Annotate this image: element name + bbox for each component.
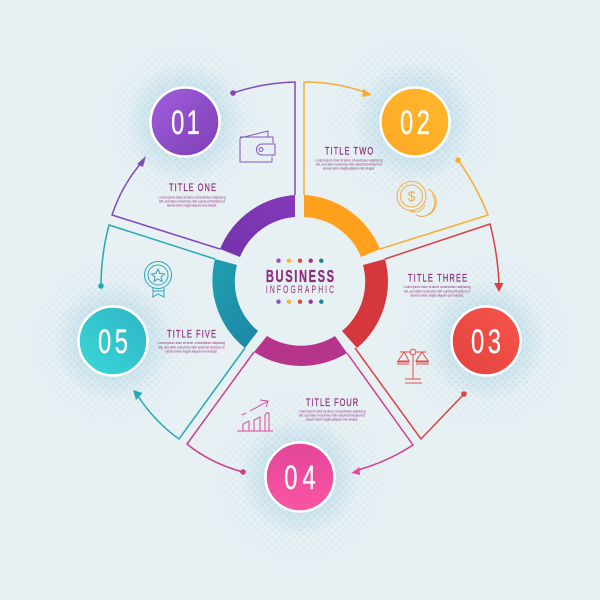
body text one: Lorem ipsum dolor sit amet, consectetuer adipiscing — [158, 195, 226, 199]
body text two — [316, 158, 382, 170]
title five: TITLE FIVE — [167, 327, 216, 340]
body text four: elit, sed diam nonummy nibh euismod tincidunt ut — [299, 414, 365, 418]
outline five with arrow — [98, 225, 245, 439]
infographic canvas — [38, 45, 563, 556]
ring segment five — [212, 259, 258, 348]
icon: coins: $ — [408, 188, 416, 204]
body text five: Lorem ipsum dolor sit amet, consectetuer adipiscing — [158, 341, 225, 345]
body text five — [158, 341, 225, 354]
icon: scales — [397, 349, 429, 383]
icon: medal — [144, 262, 172, 297]
body text three — [404, 285, 470, 297]
body text three: elit, sed diam nonummy nibh euismod tincidunt ut — [404, 289, 470, 293]
body text three: Lorem ipsum dolor sit amet, consectetuer adipiscing — [404, 285, 470, 289]
ring segment one — [220, 195, 295, 257]
title two: TITLE TWO — [325, 144, 373, 157]
icon: chart — [237, 400, 273, 431]
outline two with arrow — [304, 82, 488, 249]
body text five: elit, sed diam nonummy nibh euismod tincidunt ut — [158, 345, 224, 349]
heading business: BUSINESS — [266, 266, 334, 287]
body text two: Lorem ipsum dolor sit amet, consectetuer adipiscing — [316, 158, 382, 162]
subheading infographic: INFOGRAPHIC — [266, 283, 334, 295]
ring segment four — [254, 336, 347, 366]
body text one: elit, sed diam nonummy nibh euismod tincidunt ut — [159, 200, 225, 204]
outline four with arrow — [187, 352, 413, 475]
body text three: laoreet dolore magna aliquam erat volutpat. — [410, 293, 464, 297]
number badge 01: 01 — [171, 104, 200, 142]
title one: TITLE ONE — [169, 180, 216, 193]
ring segment two — [304, 195, 380, 257]
center title block — [266, 258, 334, 304]
number badge 05: 05 — [98, 323, 128, 361]
title four: TITLE FOUR — [306, 395, 358, 408]
halftone halos — [38, 45, 563, 556]
icon: wallet — [240, 131, 275, 162]
body text two: elit, sed diam nonummy nibh euismod tincidunt ut — [316, 162, 382, 166]
bottom dot row — [276, 300, 323, 304]
body text five: laoreet dolore magna aliquam erat volutpat. — [166, 350, 218, 354]
number badge 04 — [266, 442, 334, 512]
outline one with arrow — [112, 82, 295, 249]
number badge 02 — [380, 88, 450, 156]
title three: TITLE THREE — [408, 271, 467, 284]
number badge 03: 03 — [471, 323, 501, 361]
body text two: laoreet dolore magna aliquam erat volutpat. — [323, 166, 375, 170]
panel: step one — [112, 82, 295, 257]
body text four: laoreet dolore magna aliquam erat volutpat. — [306, 418, 358, 422]
body text four: Lorem ipsum dolor sit amet, consectetuer adipiscing — [298, 409, 366, 413]
body text one — [158, 195, 226, 208]
number badge 01 — [150, 88, 220, 156]
ring segment three — [342, 259, 388, 348]
panel: step five — [78, 225, 258, 439]
number badge 04: 04 — [284, 459, 316, 497]
number badge 02: 02 — [400, 104, 430, 142]
body text four — [298, 409, 366, 422]
icon: coins — [397, 182, 436, 217]
panel: step four — [187, 336, 413, 512]
top dot row — [276, 258, 323, 263]
number badge 05 — [78, 306, 148, 376]
panel: step two — [304, 82, 488, 257]
body text one: laoreet dolore magna aliquam erat volutpat. — [167, 204, 217, 208]
number badge 03 — [452, 306, 520, 376]
panel: step three — [342, 224, 520, 439]
outline three with arrow — [355, 224, 504, 439]
